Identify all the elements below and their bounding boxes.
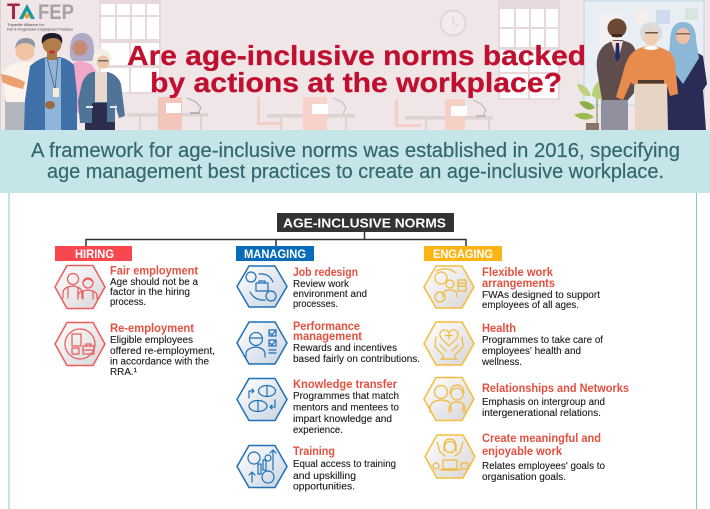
icon: two people side by side: [424, 378, 474, 420]
logo: TAFEP: Fair & Progressive Employment Practices: [7, 28, 73, 32]
text: flexible work arrangements: FWAs designed to support: [482, 290, 600, 301]
text: performance management: based fairly on contributions.: [293, 354, 420, 365]
item: flexible work arrangements: [424, 266, 600, 311]
text: fair employment: factor in the hiring: [110, 287, 190, 298]
heading: managing: MANAGING: [244, 249, 306, 261]
text: job redesign: Review work: [293, 279, 350, 290]
text: training: Equal access to training: [293, 459, 396, 470]
illustration: group of older workers, right: [597, 18, 707, 130]
heading: age-inclusive norms: AGE-INCLUSIVE NORMS: [283, 216, 446, 230]
text: re-employment: Eligible employees: [110, 335, 193, 346]
heading: hiring: [55, 246, 132, 261]
text: job redesign: [293, 267, 367, 310]
text: relationships and networks: Relationships and Networks: [482, 383, 629, 395]
title: Are age-inclusive norms backed: [127, 40, 586, 71]
heading: managing: [236, 246, 314, 261]
desks: [127, 97, 493, 130]
icon: happy person at laptop: [425, 435, 475, 478]
panel: engaging: [424, 246, 629, 483]
text: health: Health: [482, 323, 516, 335]
text: fair employment: Fair employment: [110, 266, 198, 278]
text: training: opportunities.: [293, 482, 355, 492]
text: create meaningful and enjoyable work: [482, 433, 605, 483]
text: re-employment: Re-employment: [110, 323, 194, 335]
text: health: employees' health and: [482, 346, 581, 357]
text: relationships and networks: intergenerational relations.: [482, 408, 601, 419]
person: woman in hijab: [667, 22, 707, 130]
logo: TAFEP: FEP: [38, 1, 74, 24]
panel: managing: [236, 246, 420, 492]
text: relationships and networks: Emphasis on intergroup and: [482, 397, 605, 408]
item: relationships and networks: [424, 378, 629, 420]
text: knowledge transfer: experience.: [293, 425, 343, 436]
logo: TAFEP: Tripartite Alliance for: [7, 23, 45, 27]
panel: framework statement band: [0, 130, 710, 193]
person: woman with white hair and cardigan: [78, 49, 125, 130]
text: performance management: Rewards and incentives: [293, 343, 397, 354]
text: create meaningful and enjoyable work: organisation goals.: [482, 472, 566, 483]
panel: hiring: [55, 246, 215, 378]
icon: people and briefcase swap: [237, 266, 287, 307]
item: health: [424, 322, 603, 368]
person: man in white shirt: [1, 38, 35, 130]
text: training: Training: [293, 446, 335, 458]
text: job redesign: environment and: [293, 289, 367, 300]
text: knowledge transfer: mentors and mentees to: [293, 402, 399, 414]
item: job redesign: [237, 266, 367, 310]
text: job redesign: processes.: [293, 299, 338, 310]
window left: [99, 0, 161, 94]
window right: [498, 0, 560, 100]
item: training: [237, 446, 396, 492]
item: fair employment: [55, 266, 198, 308]
illustration: plant: [574, 80, 603, 130]
text: re-employment: in accordance with the: [110, 356, 209, 368]
text: knowledge transfer: Knowledge transfer: [293, 379, 398, 391]
person: woman in blue jacket with lanyard: [24, 33, 77, 130]
item: re-employment: [55, 322, 215, 378]
text: performance management: management: [293, 331, 362, 343]
person: woman with lavender hair: [70, 33, 97, 113]
text: relationships and networks: [482, 383, 629, 419]
icon: two brains with arrows: [237, 378, 287, 420]
icon: person with checklist: [237, 322, 287, 364]
icon: two older people: [55, 266, 105, 308]
person: man in brown suit: [597, 18, 636, 130]
text: fair employment: Age should not be a: [110, 277, 198, 288]
text: flexible work arrangements: [482, 267, 600, 311]
panel: framework statement band: age management best practices to create an age-inclusive workplace.: [47, 161, 664, 183]
heading: engaging: [424, 246, 502, 261]
text: knowledge transfer: impart knowledge and: [293, 414, 392, 425]
heading: age-inclusive norms: [277, 213, 454, 232]
text: create meaningful and enjoyable work: Create meaningful and: [482, 433, 601, 445]
text: performance management: Performance: [293, 321, 360, 333]
logo: TAFEP: [7, 0, 74, 32]
icon: documents and briefcase: [55, 322, 105, 366]
text: health: [481, 323, 603, 368]
text: create meaningful and enjoyable work: Relates employees' goals to: [482, 461, 605, 472]
text: performance management: [293, 321, 420, 365]
text: knowledge transfer: [293, 379, 399, 436]
title: [127, 40, 586, 98]
item: knowledge transfer: [237, 378, 399, 436]
illustration: group of older workers, left: [1, 33, 125, 130]
text: create meaningful and enjoyable work: enjoyable work: [482, 446, 563, 458]
text: flexible work arrangements: employees of all ages.: [482, 300, 579, 311]
text: flexible work arrangements: Flexible work: [482, 267, 554, 279]
text: job redesign: Job redesign: [293, 267, 358, 279]
text: health: wellness.: [481, 357, 522, 368]
header illustration: office background: [0, 0, 710, 131]
text: fair employment: process.: [110, 297, 146, 308]
text: re-employment: offered re-employment,: [110, 346, 215, 357]
panel: framework statement band: A framework for age-inclusive norms was established in 2016, specifying: [31, 140, 680, 162]
wall clock: [440, 10, 466, 36]
icon: hands holding heart: [424, 322, 474, 365]
title: by actions at the workplace?: [150, 67, 562, 98]
text: training: [293, 446, 396, 492]
text: re-employment: [110, 323, 215, 378]
text: fair employment: [110, 266, 198, 308]
text: re-employment: RRA.¹: [110, 367, 138, 378]
text: knowledge transfer: Programmes that match: [293, 391, 399, 402]
person: woman in orange sweater: [616, 22, 678, 130]
item: create meaningful and enjoyable work: [425, 433, 605, 483]
text: training: and upskilling: [293, 471, 356, 482]
icon: person with schedule and gears: [424, 266, 474, 308]
tree connector lines: [86, 232, 466, 246]
text: flexible work arrangements: arrangements: [482, 278, 555, 290]
heading: hiring: HIRING: [75, 249, 114, 261]
text: health: Programmes to take care of: [482, 335, 603, 346]
heading: engaging: ENGAGING: [433, 249, 493, 261]
item: performance management: [237, 321, 420, 365]
notice board: [584, 1, 704, 105]
icon: gears, books and growth arrows: [237, 446, 287, 488]
